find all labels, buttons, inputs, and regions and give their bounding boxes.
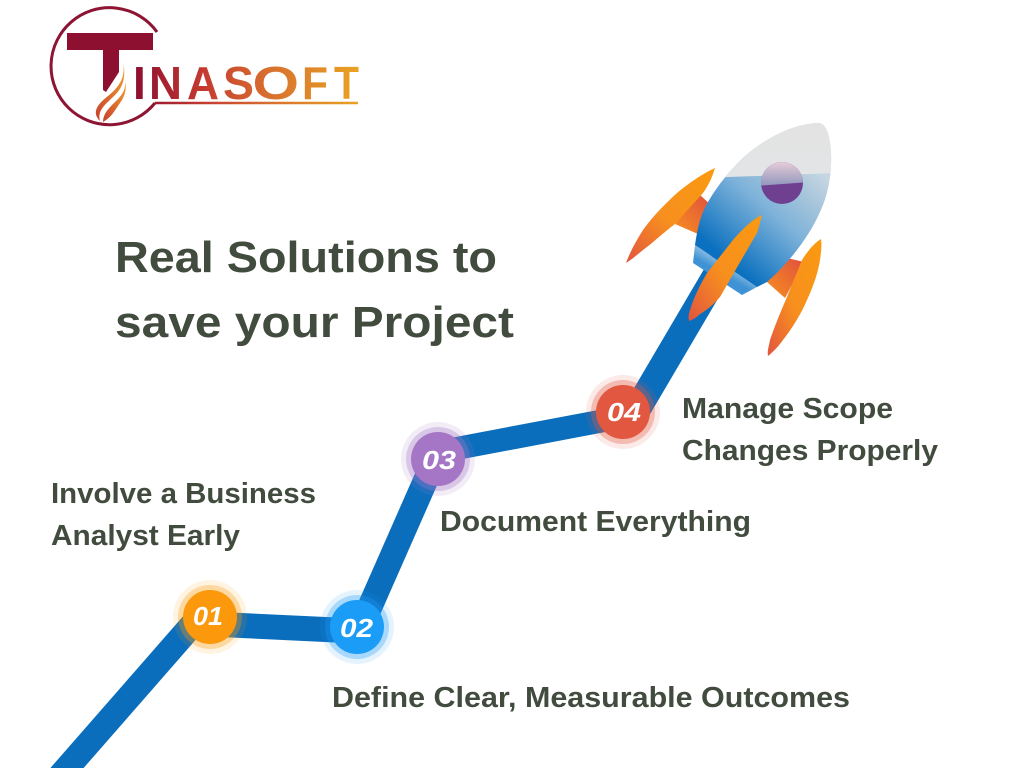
rocket window bbox=[761, 162, 803, 204]
step 01 marker bbox=[173, 580, 247, 654]
label: step 03: Document Everything bbox=[440, 506, 751, 538]
rocket right fin bbox=[768, 239, 821, 356]
logo letter T bbox=[67, 33, 153, 92]
rocket nose cap bbox=[725, 123, 831, 178]
label: step 01 bbox=[51, 478, 316, 552]
label: step 04 bbox=[682, 393, 938, 467]
logo: Tinasoft bbox=[51, 8, 359, 125]
growth path line bbox=[60, 238, 738, 768]
rocket centre fin bbox=[689, 215, 762, 321]
logo flame bbox=[96, 63, 126, 122]
step 02 marker bbox=[320, 590, 394, 664]
label: step 04: Manage Scope bbox=[682, 393, 893, 425]
title bbox=[115, 233, 514, 347]
label: step 01: Involve a Business bbox=[51, 478, 316, 510]
step 04 marker: 04 bbox=[607, 397, 642, 427]
logo wordmark: T bbox=[334, 57, 359, 109]
logo wordmark: I bbox=[133, 57, 146, 109]
title: save your Project bbox=[115, 298, 514, 347]
step 01 marker: 01 bbox=[193, 601, 223, 631]
rocket right fin connector bbox=[767, 258, 804, 298]
title: Real Solutions to bbox=[115, 233, 497, 282]
step 03 marker bbox=[401, 422, 475, 496]
rocket left fin bbox=[626, 168, 715, 263]
label: step 02: Define Clear, Measurable Outcomes bbox=[332, 682, 850, 714]
rocket bbox=[626, 123, 831, 356]
logo underline bbox=[155, 102, 358, 104]
logo ring bbox=[51, 8, 157, 125]
logo wordmark: N bbox=[149, 57, 182, 109]
step 02 marker: 02 bbox=[340, 613, 374, 643]
logo wordmark bbox=[133, 57, 359, 109]
step 03 marker: 03 bbox=[422, 445, 457, 475]
logo wordmark: O bbox=[252, 57, 299, 109]
rocket nozzle bbox=[693, 245, 757, 295]
label: step 01: Analyst Early bbox=[51, 520, 240, 552]
label: step 04: Changes Properly bbox=[682, 435, 938, 467]
logo wordmark: F bbox=[302, 57, 328, 109]
rocket body bbox=[695, 123, 831, 287]
rocket left fin connector bbox=[675, 195, 711, 234]
logo wordmark: A bbox=[187, 57, 219, 109]
step 04 marker bbox=[586, 375, 660, 449]
logo wordmark: S bbox=[223, 57, 254, 109]
